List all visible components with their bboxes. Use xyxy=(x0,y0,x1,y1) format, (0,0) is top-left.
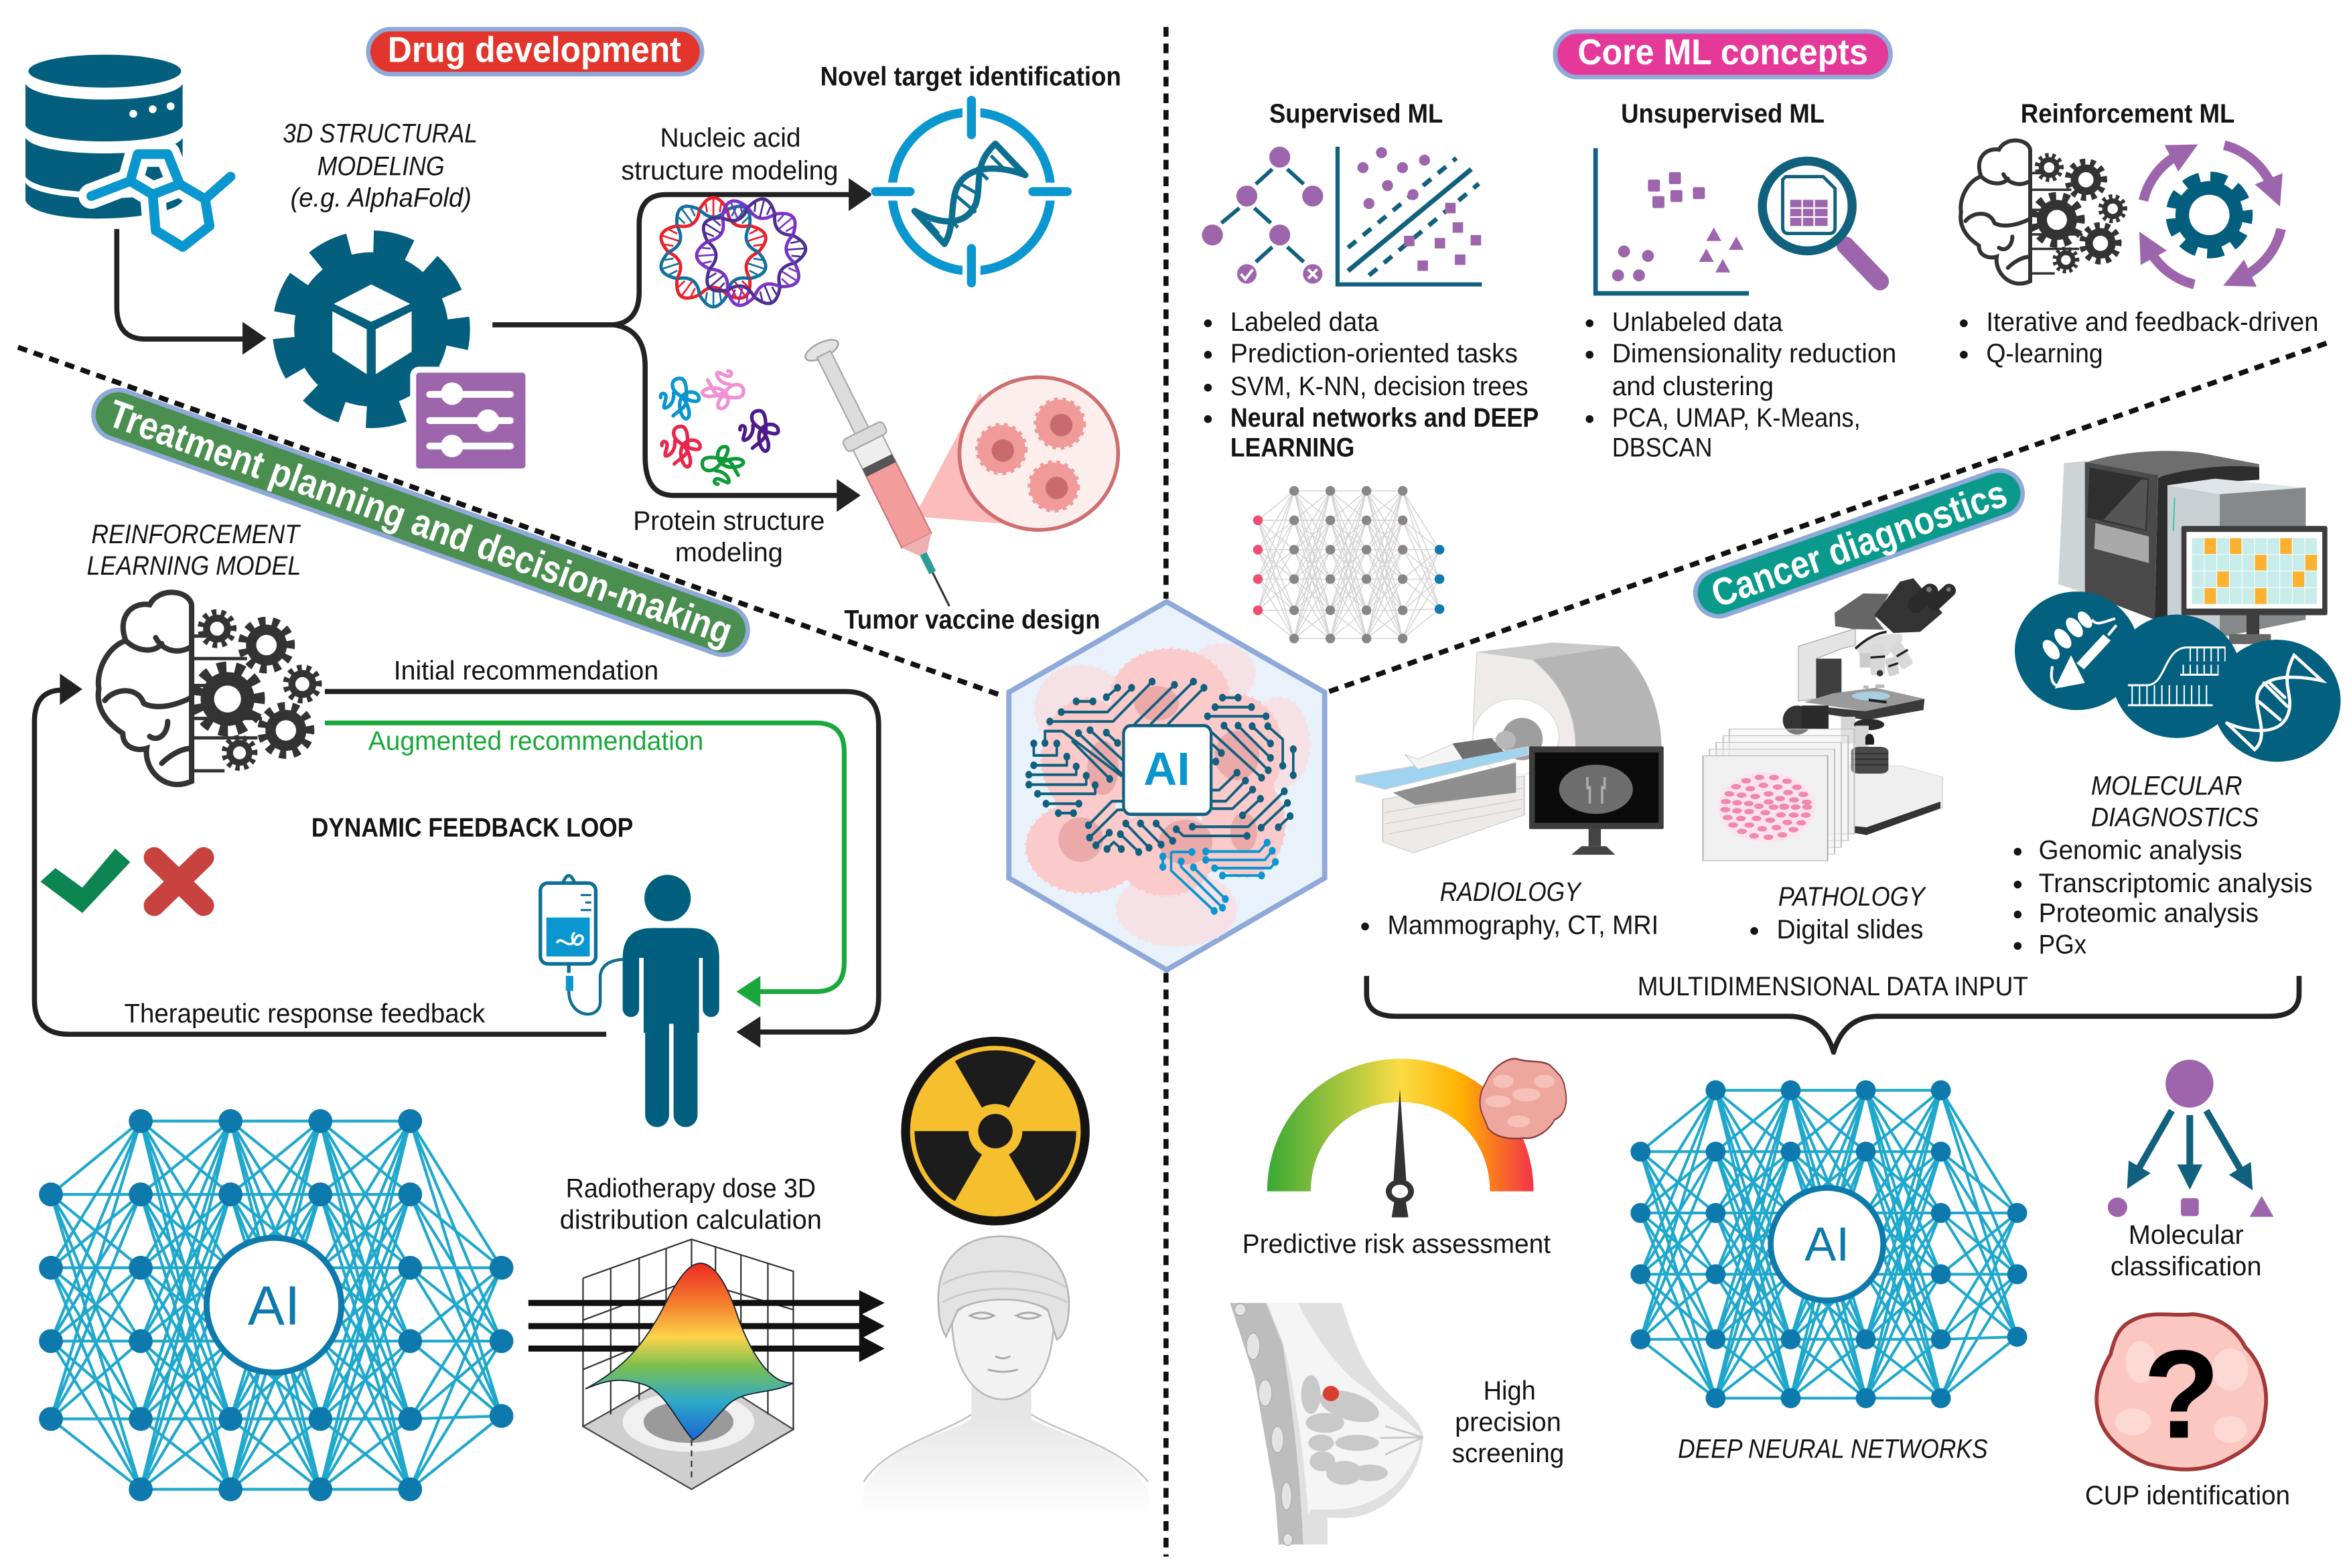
text: predictive risk assessment: Predictive risk assessment xyxy=(1242,1228,1551,1259)
list: supervised ML xyxy=(1204,307,1539,463)
panel: core ML concepts xyxy=(1202,31,2318,643)
text: 3D structural modeling: (e.g. AlphaFold) xyxy=(291,182,472,212)
icon: molecular classification tree xyxy=(2108,1060,2273,1217)
text: AI chip label: AI xyxy=(1143,743,1190,795)
chart: risk gauge xyxy=(1267,1059,1566,1217)
heading: tumor vaccine design: Tumor vaccine design xyxy=(844,605,1100,635)
list: unsupervised ML: DBSCAN xyxy=(1612,433,1712,463)
text: radiotherapy dose: distribution calculation xyxy=(560,1205,822,1235)
text: molecular diagnostics xyxy=(2014,771,2313,959)
text: radiology: Mammography, CT, MRI xyxy=(1388,910,1658,940)
text: 3D structural modeling: MODELING xyxy=(317,151,445,181)
list: supervised ML: Prediction-oriented tasks xyxy=(1230,338,1518,368)
icon: protein structures xyxy=(660,367,778,488)
arrow: initial recommendation xyxy=(325,691,879,1048)
text: deep neural networks: DEEP NEURAL NETWORKS xyxy=(1678,1434,1988,1464)
arrow: therapeutic response feedback xyxy=(34,674,606,1034)
text: molecular diagnostics: Proteomic analysis xyxy=(2039,898,2259,928)
text: molecular diagnostics: PGx xyxy=(2039,929,2086,959)
icon: patient head with cap xyxy=(861,1236,1149,1519)
text: molecular diagnostics: Transcriptomic analysis xyxy=(2039,868,2313,898)
text: high precision screening: precision xyxy=(1455,1407,1561,1437)
list: reinforcement ML xyxy=(1960,307,2318,368)
text: protein structure modeling: Protein structure xyxy=(633,506,825,536)
text: molecular diagnostics: MOLECULAR xyxy=(2091,771,2243,801)
list: supervised ML: LEARNING xyxy=(1230,433,1354,463)
text: protein structure modeling xyxy=(633,506,825,567)
list: reinforcement ML: Q-learning xyxy=(1986,338,2103,368)
chart: classification scatter xyxy=(1338,147,1482,285)
icon: brain with gears xyxy=(98,592,318,784)
text: molecular classification: classification xyxy=(2111,1251,2262,1281)
text: 3D structural modeling xyxy=(283,118,478,212)
icon: breast cross-section xyxy=(1230,1303,1423,1545)
icon: syringe xyxy=(798,334,969,616)
icon: cross mark xyxy=(154,857,204,906)
text: CUP identification: CUP identification xyxy=(2085,1480,2290,1510)
text: therapeutic response feedback: Therapeutic response feedback xyxy=(125,998,486,1028)
text: augmented recommendation: Augmented recommendation xyxy=(368,726,703,756)
heading: novel target identification: Novel target identification xyxy=(821,61,1121,91)
text: high precision screening: screening xyxy=(1452,1438,1564,1468)
panel: central AI hexagon xyxy=(1009,601,1325,970)
icon: nucleic acid rings xyxy=(656,182,821,322)
icon: brain with gears, reinforcement ML xyxy=(1961,141,2125,283)
heading: treatment planning: Treatment planning and decision-making xyxy=(103,392,738,654)
text: protein structure modeling: modeling xyxy=(675,537,783,567)
text: high precision screening: High xyxy=(1484,1375,1536,1405)
text: reinforcement learning model: LEARNING MODEL xyxy=(87,551,301,581)
list: supervised ML: Labeled data xyxy=(1230,307,1379,337)
list: unsupervised ML: PCA, UMAP, K-Means, xyxy=(1612,403,1861,433)
icon: IV bag xyxy=(541,875,623,1014)
icon: gear with cube xyxy=(288,246,454,413)
text: initial recommendation: Initial recommendation xyxy=(394,656,658,686)
chart: deep neural network: AI xyxy=(1804,1218,1849,1271)
chart: deep neural network xyxy=(1630,1080,2028,1408)
icon: MRI scanner and monitor xyxy=(1356,642,1664,855)
list: supervised ML: SVM, K-NN, decision trees xyxy=(1230,371,1528,401)
bracket: data input xyxy=(1366,976,2299,1052)
list: unsupervised ML: and clustering xyxy=(1612,371,1774,401)
icon: decision tree xyxy=(1202,147,1323,283)
text: nucleic acid: structure modeling xyxy=(621,155,838,186)
text: nucleic acid xyxy=(621,123,838,186)
list: unsupervised ML xyxy=(1585,307,1896,463)
list: unsupervised ML: Dimensionality reduction xyxy=(1612,338,1896,368)
chart: neural network AI: AI xyxy=(248,1275,300,1337)
text: molecular diagnostics: Genomic analysis xyxy=(2039,835,2243,865)
chart: small neural network xyxy=(1253,486,1444,643)
panel: drug development xyxy=(25,29,1121,635)
arrow: augmented recommendation xyxy=(325,723,844,1007)
icon: sliders xyxy=(413,370,528,472)
heading: reinforcement ML: Reinforcement ML xyxy=(2021,98,2234,129)
text: molecular classification: Molecular xyxy=(2129,1220,2244,1250)
icon: sequencer with heatmap and molecular badges xyxy=(2015,451,2340,762)
icon: microscope and digital slides xyxy=(1703,578,1951,861)
icon: CUP tumor with question mark xyxy=(2096,1314,2266,1470)
icon: DNA target xyxy=(871,96,1072,287)
heading: supervised ML: Supervised ML xyxy=(1269,98,1443,129)
icon: feedback cycle gear xyxy=(2143,145,2281,285)
text: radiotherapy dose: Radiotherapy dose 3D xyxy=(566,1173,816,1204)
chart: neural network AI xyxy=(39,1109,514,1501)
icon: patient figure xyxy=(623,875,719,1127)
text: molecular classification xyxy=(2111,1220,2262,1281)
icon: magnifier over data table xyxy=(1762,161,1880,281)
text: pathology: Digital slides xyxy=(1777,914,1924,944)
icon: check mark xyxy=(40,849,130,913)
heading: drug development: Drug development xyxy=(388,30,681,70)
text: pathology: PATHOLOGY xyxy=(1778,881,1927,912)
list: unsupervised ML: Unlabeled data xyxy=(1612,307,1783,337)
text: radiology xyxy=(1361,877,1658,940)
text: molecular diagnostics: DIAGNOSTICS xyxy=(2091,802,2259,833)
text: pathology xyxy=(1750,881,1927,944)
panel: cancer diagnostics xyxy=(1230,451,2340,1545)
text: radiotherapy dose xyxy=(560,1173,822,1235)
arrow: database to modeling xyxy=(117,229,267,355)
heading: cancer diagnostics: Cancer diagnostics xyxy=(1706,472,2013,616)
icon: tumor cells and circuit chip xyxy=(1026,644,1309,946)
text: 3D structural modeling: 3D STRUCTURAL xyxy=(283,118,478,148)
text: reinforcement learning model: REINFORCEMENT xyxy=(91,519,301,549)
text: reinforcement learning model xyxy=(87,519,301,581)
text: radiology: RADIOLOGY xyxy=(1440,877,1583,907)
heading: core ML concepts: Core ML concepts xyxy=(1577,32,1868,72)
chart: clustering scatter xyxy=(1595,148,1749,293)
icon: tumor cells magnified xyxy=(914,377,1118,530)
icon: database with molecule xyxy=(25,55,230,247)
panel: treatment planning xyxy=(34,383,1149,1519)
list: supervised ML: Neural networks and DEEP xyxy=(1230,403,1539,433)
heading: dynamic feedback loop: DYNAMIC FEEDBACK LOOP xyxy=(311,812,633,843)
list: reinforcement ML: Iterative and feedback-driven xyxy=(1986,307,2318,337)
text: nucleic acid: Nucleic acid xyxy=(660,123,801,153)
chart: 3D dose distribution xyxy=(528,1239,885,1489)
heading: unsupervised ML: Unsupervised ML xyxy=(1621,98,1825,129)
branching arrows xyxy=(492,178,873,512)
text: high precision screening xyxy=(1452,1375,1564,1468)
text: multidimensional data input: MULTIDIMENSIONAL DATA INPUT xyxy=(1638,971,2028,1001)
icon: CUP tumor with question mark: ? xyxy=(2143,1324,2220,1464)
hexagon background xyxy=(1009,601,1325,970)
icon: radiation symbol xyxy=(906,1042,1085,1221)
